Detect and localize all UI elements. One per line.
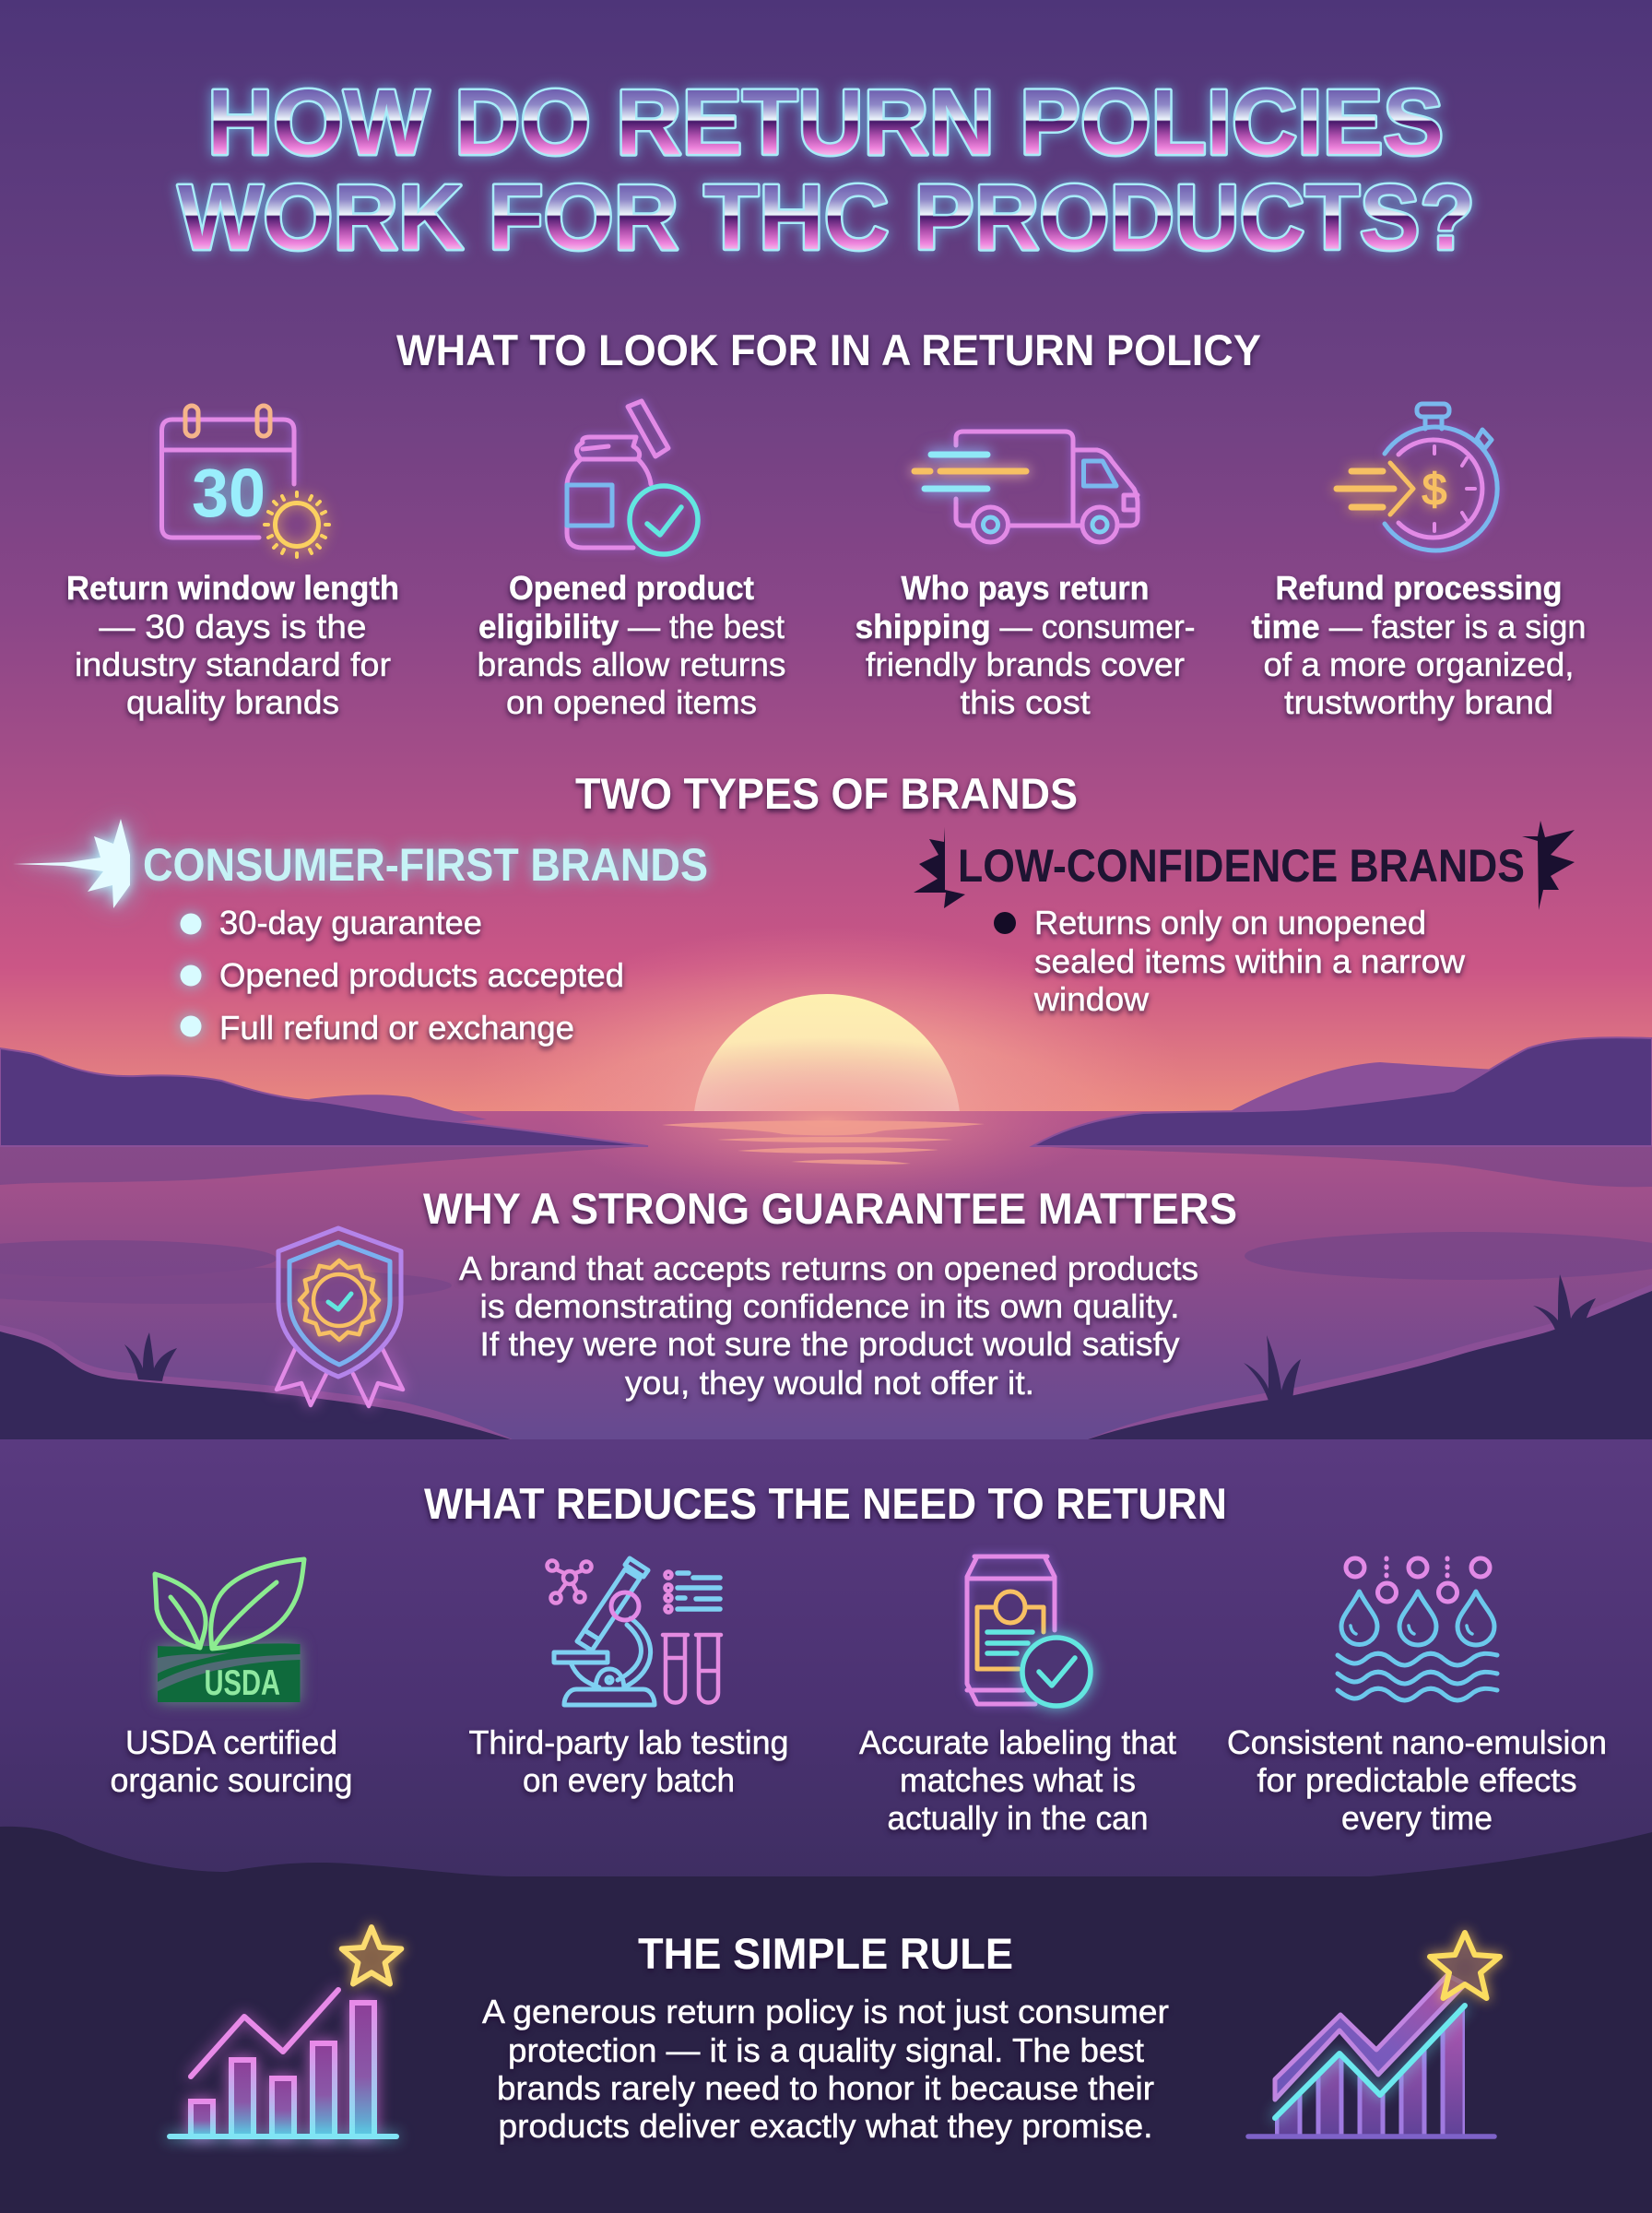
text: accurate labeling (859, 1723, 1176, 1837)
icon: low-confidence right burst (1522, 821, 1575, 910)
icon: USDA leaves: USDA (205, 1663, 280, 1703)
text: opened product eligibility: Opened product (509, 569, 754, 607)
heading: consumer-first brands: CONSUMER-FIRST BRANDS (143, 839, 708, 891)
text: guarantee explanation (459, 1249, 1198, 1402)
background: lower right dark hill front (1085, 1291, 1652, 1440)
heading: what reduces the need to return: WHAT REDUCES THE NEED TO RETURN (424, 1479, 1227, 1528)
list: low-confidence limits (994, 904, 1466, 1018)
background: lower left dark hill (0, 1325, 516, 1441)
panel: two types of brands (13, 769, 1575, 1047)
text: who pays return shipping: friendly brands cover (866, 645, 1185, 683)
panel: the simple rule (170, 1927, 1500, 2145)
background: upper left hill (0, 1048, 648, 1146)
panel: what reduces the need to return (111, 1479, 1607, 1837)
text: accurate labeling: matches what is (900, 1761, 1136, 1799)
text: return window length: quality brands (126, 683, 339, 721)
text: guarantee explanation: If they were not sure the product would satisfy (479, 1325, 1180, 1363)
text: usda certified: USDA certified (125, 1723, 337, 1761)
background: upper right hill (1032, 1037, 1652, 1146)
background: water glow (550, 1037, 1103, 1203)
text: simple rule explanation: protection — it is a quality signal. The best (508, 2031, 1144, 2069)
background: footer dark hills (0, 1827, 1652, 2213)
text: simple rule explanation: brands rarely need to honor it because their (497, 2069, 1154, 2107)
text: usda certified: organic sourcing (111, 1761, 352, 1799)
icon: delivery truck (914, 432, 1138, 542)
text: consistent nano-emulsion: for predictable effects (1257, 1761, 1576, 1799)
heading: low-confidence brands: LOW-CONFIDENCE BRANDS (958, 840, 1525, 892)
icon: grass tufts (124, 1274, 1596, 1406)
icon: USDA leaves (155, 1559, 304, 1703)
text: who pays return shipping (856, 569, 1195, 721)
title line 2: WORK FOR THC PRODUCTS? (178, 166, 1475, 269)
text: opened product eligibility: eligibility — the best (478, 608, 785, 645)
text: refund processing time: Refund processing (1276, 569, 1562, 607)
panel: why a strong guarantee matters (277, 1184, 1237, 1406)
background: back right hill (1227, 1062, 1567, 1116)
text: refund processing time: time — faster is a sign (1252, 608, 1586, 645)
background: lower band (0, 1439, 1652, 1882)
background: back left hill (309, 1095, 487, 1125)
text: opened product eligibility: brands allow returns (478, 645, 785, 683)
text: refund processing time (1252, 569, 1586, 721)
text: who pays return shipping: Who pays return (902, 569, 1149, 607)
list: low-confidence limits: window (1033, 980, 1150, 1018)
heading: two types of brands: TWO TYPES OF BRANDS (575, 769, 1078, 818)
panel: what to look for (66, 325, 1586, 721)
heading: why a strong guarantee matters: WHY A STRONG GUARANTEE MATTERS (423, 1184, 1237, 1233)
text: who pays return shipping: this cost (961, 683, 1090, 721)
background: sun halo (458, 927, 1196, 1277)
background: lower right dark hill (1085, 1284, 1652, 1440)
heading: the simple rule: THE SIMPLE RULE (638, 1929, 1013, 1978)
text: opened product eligibility: on opened items (506, 683, 757, 721)
icon: calendar with sun (162, 406, 329, 557)
text: guarantee explanation: A brand that accepts returns on opened products (459, 1249, 1198, 1287)
icon: opened jar (567, 401, 698, 554)
chart: rising bars with line and star (170, 1927, 401, 2136)
background: hill reflections (0, 1146, 1652, 1304)
list: consumer-first benefits: Opened products accepted (219, 956, 624, 994)
text: third-party lab testing: on every batch (523, 1761, 735, 1799)
text: consistent nano-emulsion: every time (1341, 1799, 1493, 1837)
icon: nano-emulsion drops (1338, 1558, 1497, 1700)
text: return window length: Return window length (66, 569, 399, 607)
icon: shield badge (277, 1228, 403, 1406)
background: water (0, 1111, 1652, 1443)
text: guarantee explanation: you, they would not offer it. (625, 1364, 1034, 1402)
text: who pays return shipping: shipping — consumer- (856, 608, 1195, 645)
text: simple rule explanation (482, 1993, 1169, 2145)
icon: low-confidence left burst (914, 827, 965, 908)
text: accurate labeling: Accurate labeling that (859, 1723, 1176, 1761)
text: consistent nano-emulsion: Consistent nano-emulsion (1227, 1723, 1607, 1761)
icon: stopwatch with dollar (1337, 404, 1497, 550)
title (178, 71, 1475, 269)
icon: consumer-first burst (13, 819, 130, 908)
text: opened product eligibility (478, 569, 785, 721)
text: third-party lab testing: Third-party lab testing (468, 1723, 789, 1761)
chart: rising arrow bars with star (1248, 1933, 1500, 2136)
icon: stopwatch with dollar: $ (1422, 466, 1446, 515)
text: third-party lab testing (468, 1723, 789, 1799)
heading: what to look for: WHAT TO LOOK FOR IN A RETURN POLICY (396, 325, 1261, 374)
list: consumer-first benefits (181, 904, 624, 1047)
icon: setting sun (694, 994, 960, 1112)
icon: labeled can (967, 1556, 1091, 1706)
icon: calendar with sun: 30 (192, 455, 266, 531)
text: consistent nano-emulsion (1227, 1723, 1607, 1837)
text: simple rule explanation: A generous return policy is not just consumer (482, 1993, 1169, 2030)
text: usda certified (111, 1723, 352, 1799)
text: guarantee explanation: is demonstrating confidence in its own quality. (479, 1287, 1180, 1325)
title line 1: HOW DO RETURN POLICIES (207, 71, 1444, 174)
text: return window length: — 30 days is the (100, 608, 367, 645)
list: consumer-first benefits: 30-day guarantee (219, 904, 482, 941)
text: accurate labeling: actually in the can (887, 1799, 1149, 1837)
text: return window length (66, 569, 399, 721)
list: low-confidence limits: Returns only on unopened (1034, 904, 1426, 941)
list: low-confidence limits: sealed items within a narrow (1034, 942, 1466, 980)
text: return window length: industry standard for (75, 645, 391, 683)
icon: microscope (548, 1558, 721, 1705)
background: lower left dark hill front (0, 1331, 516, 1441)
background: sun reflection (662, 1120, 985, 1165)
text: refund processing time: of a more organized, (1263, 645, 1575, 683)
text: simple rule explanation: products deliver exactly what they promise. (498, 2107, 1152, 2145)
list: consumer-first benefits: Full refund or exchange (219, 1009, 574, 1047)
background: sunset sky (0, 0, 1652, 1112)
text: refund processing time: trustworthy brand (1284, 683, 1553, 721)
